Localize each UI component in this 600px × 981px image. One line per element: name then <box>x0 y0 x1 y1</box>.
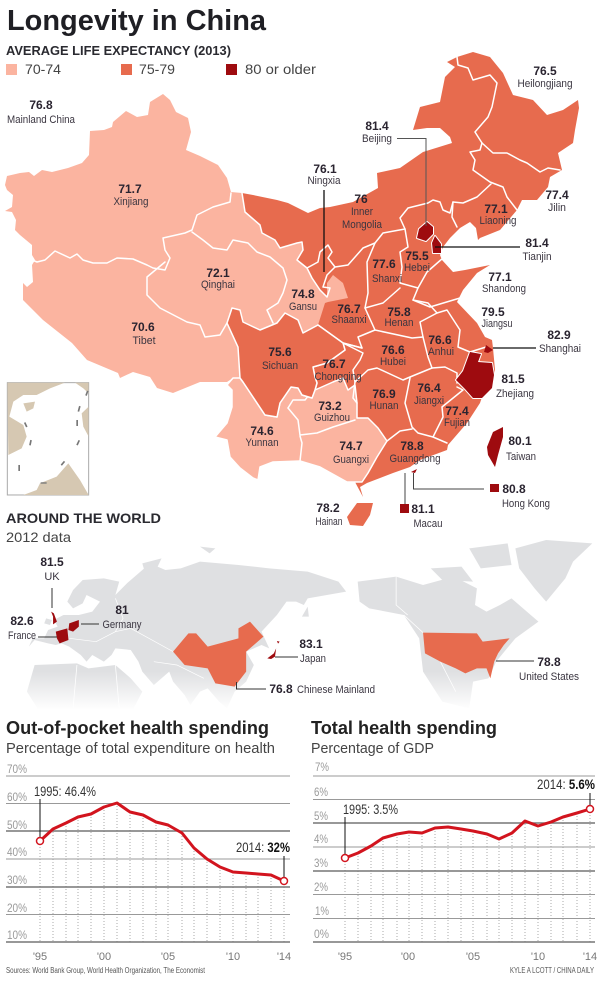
world map <box>8 540 592 710</box>
world labels: Germany <box>102 619 142 631</box>
province labels: Jiangsu <box>482 318 512 330</box>
legend: 80 or older <box>245 61 316 77</box>
province labels: Guangxi <box>333 454 369 466</box>
callout 2014: 2014: 32% <box>236 839 290 855</box>
province labels: 76.4 <box>417 381 441 395</box>
province labels: 77.4 <box>445 404 469 418</box>
y axis labels: 40% <box>7 845 27 859</box>
province labels: 72.1 <box>206 266 230 280</box>
y axis labels: 2% <box>314 880 328 894</box>
x axis labels <box>33 951 291 963</box>
province labels: Qinghai <box>201 279 235 291</box>
chart subheading: Percentage of total expenditure on health <box>6 741 275 757</box>
province labels: 73.2 <box>318 399 342 413</box>
y axis labels: 7% <box>315 760 329 774</box>
y axis labels: 5% <box>314 809 328 823</box>
province labels: 74.6 <box>250 424 274 438</box>
x axis labels: '05 <box>161 951 175 963</box>
province labels: 76.5 <box>533 64 557 78</box>
Zhejiang <box>456 352 494 398</box>
world labels: UK <box>44 571 60 583</box>
province labels: Liaoning <box>480 215 516 227</box>
Tianjin <box>432 236 441 253</box>
red data line <box>345 809 590 858</box>
world labels: 81.5 <box>40 555 64 569</box>
y axis labels: 60% <box>7 790 27 804</box>
province labels: Anhui <box>428 346 454 358</box>
subtitle: average life expectancy: AVERAGE LIFE EXPECTANCY (2013) <box>6 43 231 58</box>
y axis labels: 0% <box>314 927 329 941</box>
France <box>56 628 68 643</box>
map of China <box>5 52 581 530</box>
province labels: Tibet <box>132 335 156 347</box>
province labels: 81.1 <box>411 502 435 516</box>
mainland, 75-79 base <box>240 52 579 497</box>
province labels: 74.8 <box>291 287 315 301</box>
province labels: 81.4 <box>365 119 389 133</box>
inset: South China Sea <box>7 383 89 495</box>
Shanghai <box>484 345 493 353</box>
Taiwan <box>487 427 503 467</box>
province labels: 77.6 <box>372 257 396 271</box>
province labels: 75.6 <box>268 345 292 359</box>
countries highlighted <box>51 612 510 687</box>
chart: out-of-pocket health spending <box>6 718 291 963</box>
title: Longevity in China <box>7 5 267 37</box>
heading: around the world: AROUND THE WORLD <box>6 510 161 526</box>
world labels: France <box>8 630 36 642</box>
y axis labels: 3% <box>314 856 328 870</box>
Japan <box>267 641 280 659</box>
province labels: 76.9 <box>372 387 396 401</box>
callout 2014 <box>537 776 595 812</box>
grey landmasses <box>27 540 592 710</box>
province labels: 76.7 <box>322 357 346 371</box>
x axis labels: '10 <box>531 951 545 963</box>
world connector lines <box>38 588 534 689</box>
province labels: Henan <box>384 317 414 329</box>
province labels: Macau <box>414 518 442 530</box>
white land borders <box>69 577 456 708</box>
legend <box>6 61 316 77</box>
subheading: 2012 data: 2012 data <box>6 529 71 545</box>
province labels <box>7 64 581 530</box>
callout 2014 <box>236 839 290 884</box>
province labels: Mainland China <box>7 114 76 126</box>
province labels: Hubei <box>380 356 406 368</box>
x axis labels <box>338 951 597 963</box>
chart heading: Out-of-pocket health spending <box>6 718 269 738</box>
Beijing <box>417 222 433 241</box>
x axis labels: '10 <box>226 951 240 963</box>
province labels: Hebei <box>404 262 430 274</box>
y axis labels <box>7 762 27 942</box>
province borders <box>32 57 560 461</box>
province labels: Ningxia <box>308 175 341 187</box>
province labels: 80.1 <box>508 434 532 448</box>
province labels: Gansu <box>289 301 317 313</box>
province labels: Jiangxi <box>414 395 444 407</box>
world labels: 83.1 <box>299 637 323 651</box>
red data line <box>40 803 284 881</box>
province labels: Mongolia <box>342 219 383 231</box>
province labels: Shandong <box>482 283 526 295</box>
world labels <box>8 555 579 696</box>
world labels: 78.8 <box>537 655 561 669</box>
callout 1995: 1995: 3.5% <box>343 801 398 817</box>
province labels: 70.6 <box>131 320 155 334</box>
y axis labels: 20% <box>7 901 27 915</box>
world labels: Japan <box>300 653 326 665</box>
province labels: Shaanxi <box>332 314 366 326</box>
province labels: Hunan <box>370 400 398 412</box>
province labels: 76 <box>354 192 368 206</box>
province labels: 78.8 <box>400 439 424 453</box>
sources: Sources: World Bank Group, World Health Organization, The Economist <box>6 966 206 975</box>
province labels: 71.7 <box>118 182 142 196</box>
world labels: 81 <box>115 603 129 617</box>
Macau square <box>400 504 409 513</box>
province labels: 81.4 <box>525 236 549 250</box>
United States <box>423 633 510 678</box>
world labels: 76.8 <box>269 682 293 696</box>
province labels: Beijing <box>362 133 392 145</box>
province labels: 74.7 <box>339 439 363 453</box>
province labels: 79.5 <box>481 305 505 319</box>
y axis labels: 4% <box>314 832 328 846</box>
callout 1995 <box>34 783 96 844</box>
callout 2014: 2014: 5.6% <box>537 776 595 792</box>
legend: 70-74 <box>25 61 61 77</box>
province labels: 75.5 <box>405 249 429 263</box>
callout 1995 <box>342 801 398 862</box>
chart heading: Total health spending <box>311 718 497 738</box>
province labels: 77.1 <box>484 202 508 216</box>
Sichuan <box>227 308 345 417</box>
China <box>173 622 263 687</box>
province labels: Hong Kong <box>502 498 550 510</box>
world labels: 82.6 <box>10 614 34 628</box>
south-west provinces: Yunnan, Guizhou, Guangxi <box>215 378 387 482</box>
province labels: 76.7 <box>337 302 361 316</box>
x axis labels: '14 <box>583 951 597 963</box>
province labels: 76.6 <box>381 343 405 357</box>
y axis labels: 6% <box>314 785 328 799</box>
province labels: Hainan <box>316 516 342 528</box>
x axis labels: '14 <box>277 951 291 963</box>
chart: total health spending <box>311 718 597 963</box>
province labels: 76.6 <box>428 333 452 347</box>
x axis labels: '95 <box>33 951 47 963</box>
province labels: Taiwan <box>506 451 536 463</box>
province labels: Heilongjiang <box>518 78 572 90</box>
province labels: Zhejiang <box>496 388 534 400</box>
x axis labels: '00 <box>97 951 111 963</box>
west provinces: Xinjiang, Tibet, Qinghai, Gansu <box>5 94 348 393</box>
province labels: Sichuan <box>262 360 298 372</box>
x axis labels: '95 <box>338 951 352 963</box>
world labels: Chinese Mainland <box>297 684 375 696</box>
province labels: Shanghai <box>539 343 581 355</box>
x axis labels: '05 <box>466 951 480 963</box>
province labels: Yunnan <box>246 437 278 449</box>
x axis labels: '00 <box>401 951 415 963</box>
Hong Kong and Macau marks <box>411 469 417 473</box>
Hong Kong square <box>490 484 499 492</box>
y axis labels: 10% <box>7 928 27 942</box>
province labels: 81.5 <box>501 372 525 386</box>
y axis labels <box>314 760 329 941</box>
province labels: Shanxi <box>372 273 402 285</box>
province labels: Guangdong <box>390 453 440 465</box>
y axis labels: 70% <box>7 762 27 776</box>
province labels: Guizhou <box>314 412 350 424</box>
Hainan <box>347 503 373 526</box>
UK <box>51 612 57 624</box>
Germany <box>68 620 79 632</box>
province labels: Tianjin <box>522 251 552 263</box>
y axis labels: 1% <box>315 904 329 918</box>
world labels: United States <box>519 671 579 683</box>
province labels: 76.1 <box>313 162 337 176</box>
province labels: 80.8 <box>502 482 526 496</box>
province labels: 78.2 <box>316 501 340 515</box>
chart subheading: Percentage of GDP <box>311 741 434 757</box>
province labels: Xinjiang <box>114 196 148 208</box>
y axis labels: 50% <box>7 818 27 832</box>
province labels: 76.8 <box>29 98 53 112</box>
province labels: Inner <box>351 206 373 218</box>
province labels: 75.8 <box>387 305 411 319</box>
province labels: Chongqing <box>314 371 362 383</box>
legend: 75-79 <box>139 61 175 77</box>
province labels: 77.4 <box>545 188 569 202</box>
y axis labels: 30% <box>7 873 27 887</box>
callout 1995: 1995: 46.4% <box>34 783 96 799</box>
province labels: Fujian <box>444 417 470 429</box>
province labels: 77.1 <box>488 270 512 284</box>
province labels: 82.9 <box>547 328 571 342</box>
connector lines <box>324 138 536 504</box>
province labels: Jilin <box>548 202 566 214</box>
